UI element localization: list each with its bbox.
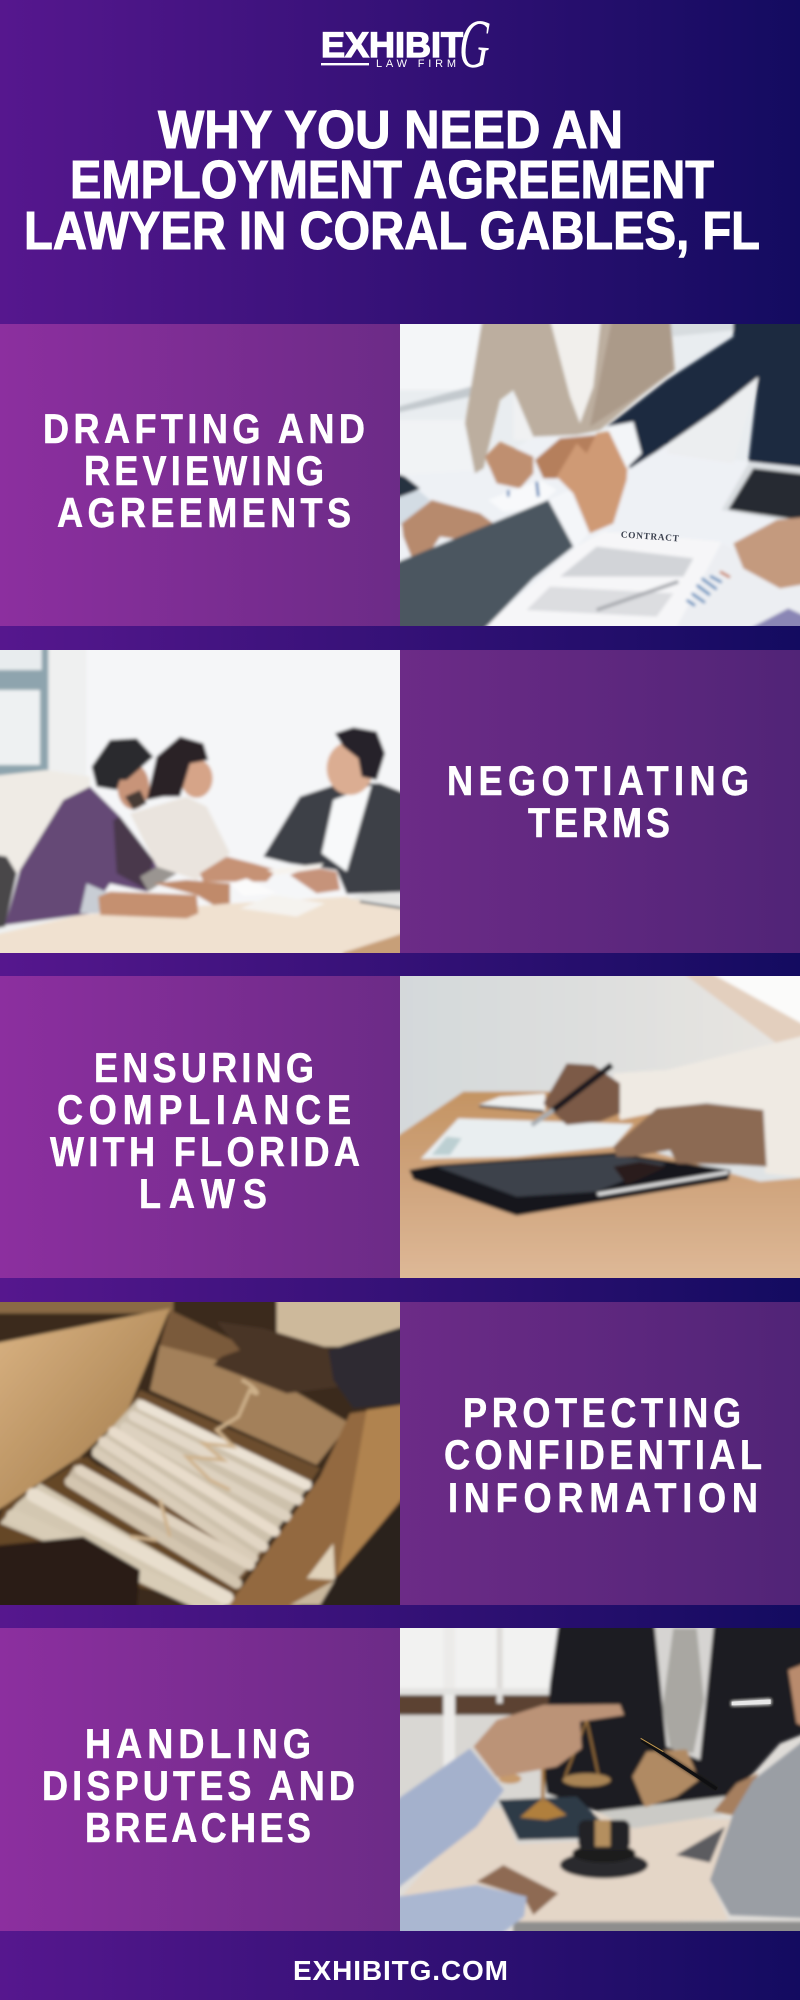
photo: handshake over a contract: CONTRACT <box>620 530 680 544</box>
seated hands <box>485 442 533 488</box>
heading: handling disputes and breaches: BREACHES <box>85 1806 311 1852</box>
table <box>387 1092 800 1290</box>
heading: handling disputes and breaches <box>42 1722 355 1852</box>
heading: protecting confidential information: INFORMATION <box>448 1476 758 1522</box>
bright files <box>92 1398 312 1557</box>
man 1 <box>5 787 177 925</box>
heading: ensuring compliance with Florida laws: LAWS <box>139 1172 267 1218</box>
scales <box>520 1800 567 1820</box>
beige jacket <box>465 313 675 473</box>
handshake <box>557 430 628 533</box>
tablet and laptop <box>597 1794 743 1828</box>
box interior back <box>158 1310 240 1361</box>
woman <box>130 797 230 880</box>
heading: protecting confidential information: CONFIDENTIAL <box>444 1433 762 1479</box>
chart page <box>672 543 800 637</box>
heading: ensuring compliance with Florida laws: ENSURING <box>94 1046 314 1092</box>
heading: handling disputes and breaches: HANDLING <box>85 1722 311 1768</box>
contract paper <box>473 532 722 637</box>
heading: ensuring compliance with Florida laws: WITH FLORIDA <box>50 1130 360 1176</box>
upper hand and pen <box>543 1063 620 1125</box>
blue sleeve <box>387 1748 504 1897</box>
title: WHY YOU NEED AN <box>158 100 623 160</box>
grey man <box>710 1733 800 1918</box>
back paper <box>478 1093 545 1112</box>
grey sleeve <box>400 498 575 626</box>
heading: ensuring compliance with Florida laws: COMPLIANCE <box>57 1088 351 1134</box>
photo: archive box of tied files <box>0 1302 400 1605</box>
chair <box>0 853 17 930</box>
heading: negotiating terms: NEGOTIATING <box>447 759 749 805</box>
pen hand <box>632 1749 699 1807</box>
heading: handling disputes and breaches: DISPUTES AND <box>42 1764 355 1810</box>
heading: drafting and reviewing agreements <box>43 407 365 537</box>
logo: Exhibit G Law Firm: G <box>457 6 492 84</box>
photo: couple meeting a lawyer <box>0 650 400 953</box>
photo: lawyer with scales and gavel <box>400 1628 800 1931</box>
heading: negotiating terms: TERMS <box>528 801 670 847</box>
heading: protecting confidential information: PROTECTING <box>463 1391 741 1437</box>
panel 3: ensuring compliance with Florida laws <box>0 976 400 1278</box>
navy jacket <box>607 313 800 468</box>
left hand and dark sleeve <box>400 472 421 500</box>
logo: Exhibit G Law Firm <box>321 6 492 84</box>
heading: ensuring compliance with Florida laws <box>50 1046 360 1218</box>
heading: negotiating terms <box>447 759 749 847</box>
footer website: EXHIBITG.COM <box>293 1955 508 1986</box>
table <box>404 1809 730 1922</box>
lower hand <box>613 1103 767 1167</box>
sleeve <box>613 1033 800 1178</box>
tablet <box>409 1153 731 1216</box>
inner brown divider <box>123 1390 320 1483</box>
heading: drafting and reviewing agreements: DRAFTING AND <box>43 407 365 453</box>
panel 4: protecting confidential information <box>400 1302 800 1605</box>
logo: Exhibit G Law Firm: EXHIBIT <box>321 26 463 65</box>
right hand <box>733 517 800 588</box>
pointing hand <box>473 1704 624 1777</box>
lower right paper <box>656 1148 800 1184</box>
photo: handshake over a contract <box>387 313 800 637</box>
suit <box>542 1628 800 1814</box>
logo: Exhibit G Law Firm: LAW FIRM <box>376 58 456 70</box>
box left side <box>0 1308 170 1517</box>
heading: drafting and reviewing agreements: AGREEMENTS <box>57 491 351 537</box>
string ties <box>130 1380 257 1540</box>
hand and sleeve <box>213 1322 340 1393</box>
right side of box <box>228 1409 400 1605</box>
panel 2: negotiating terms <box>400 650 800 953</box>
bottom left dark hand <box>0 1537 140 1613</box>
title: EMPLOYMENT AGREEMENT <box>70 150 714 210</box>
papers <box>267 863 323 875</box>
book <box>498 1797 600 1840</box>
table <box>400 434 800 609</box>
title <box>24 100 760 261</box>
gavel <box>560 1852 648 1878</box>
lawyer <box>263 783 413 894</box>
table <box>0 896 400 953</box>
paper <box>421 1118 633 1159</box>
panel 5: handling disputes and breaches <box>0 1628 400 1931</box>
heading: protecting confidential information <box>444 1391 762 1522</box>
heading: drafting and reviewing agreements: REVIEWING <box>84 449 324 495</box>
photo: hands on a tablet with a pen <box>400 976 800 1278</box>
panel 1: drafting and reviewing agreements <box>0 324 400 626</box>
